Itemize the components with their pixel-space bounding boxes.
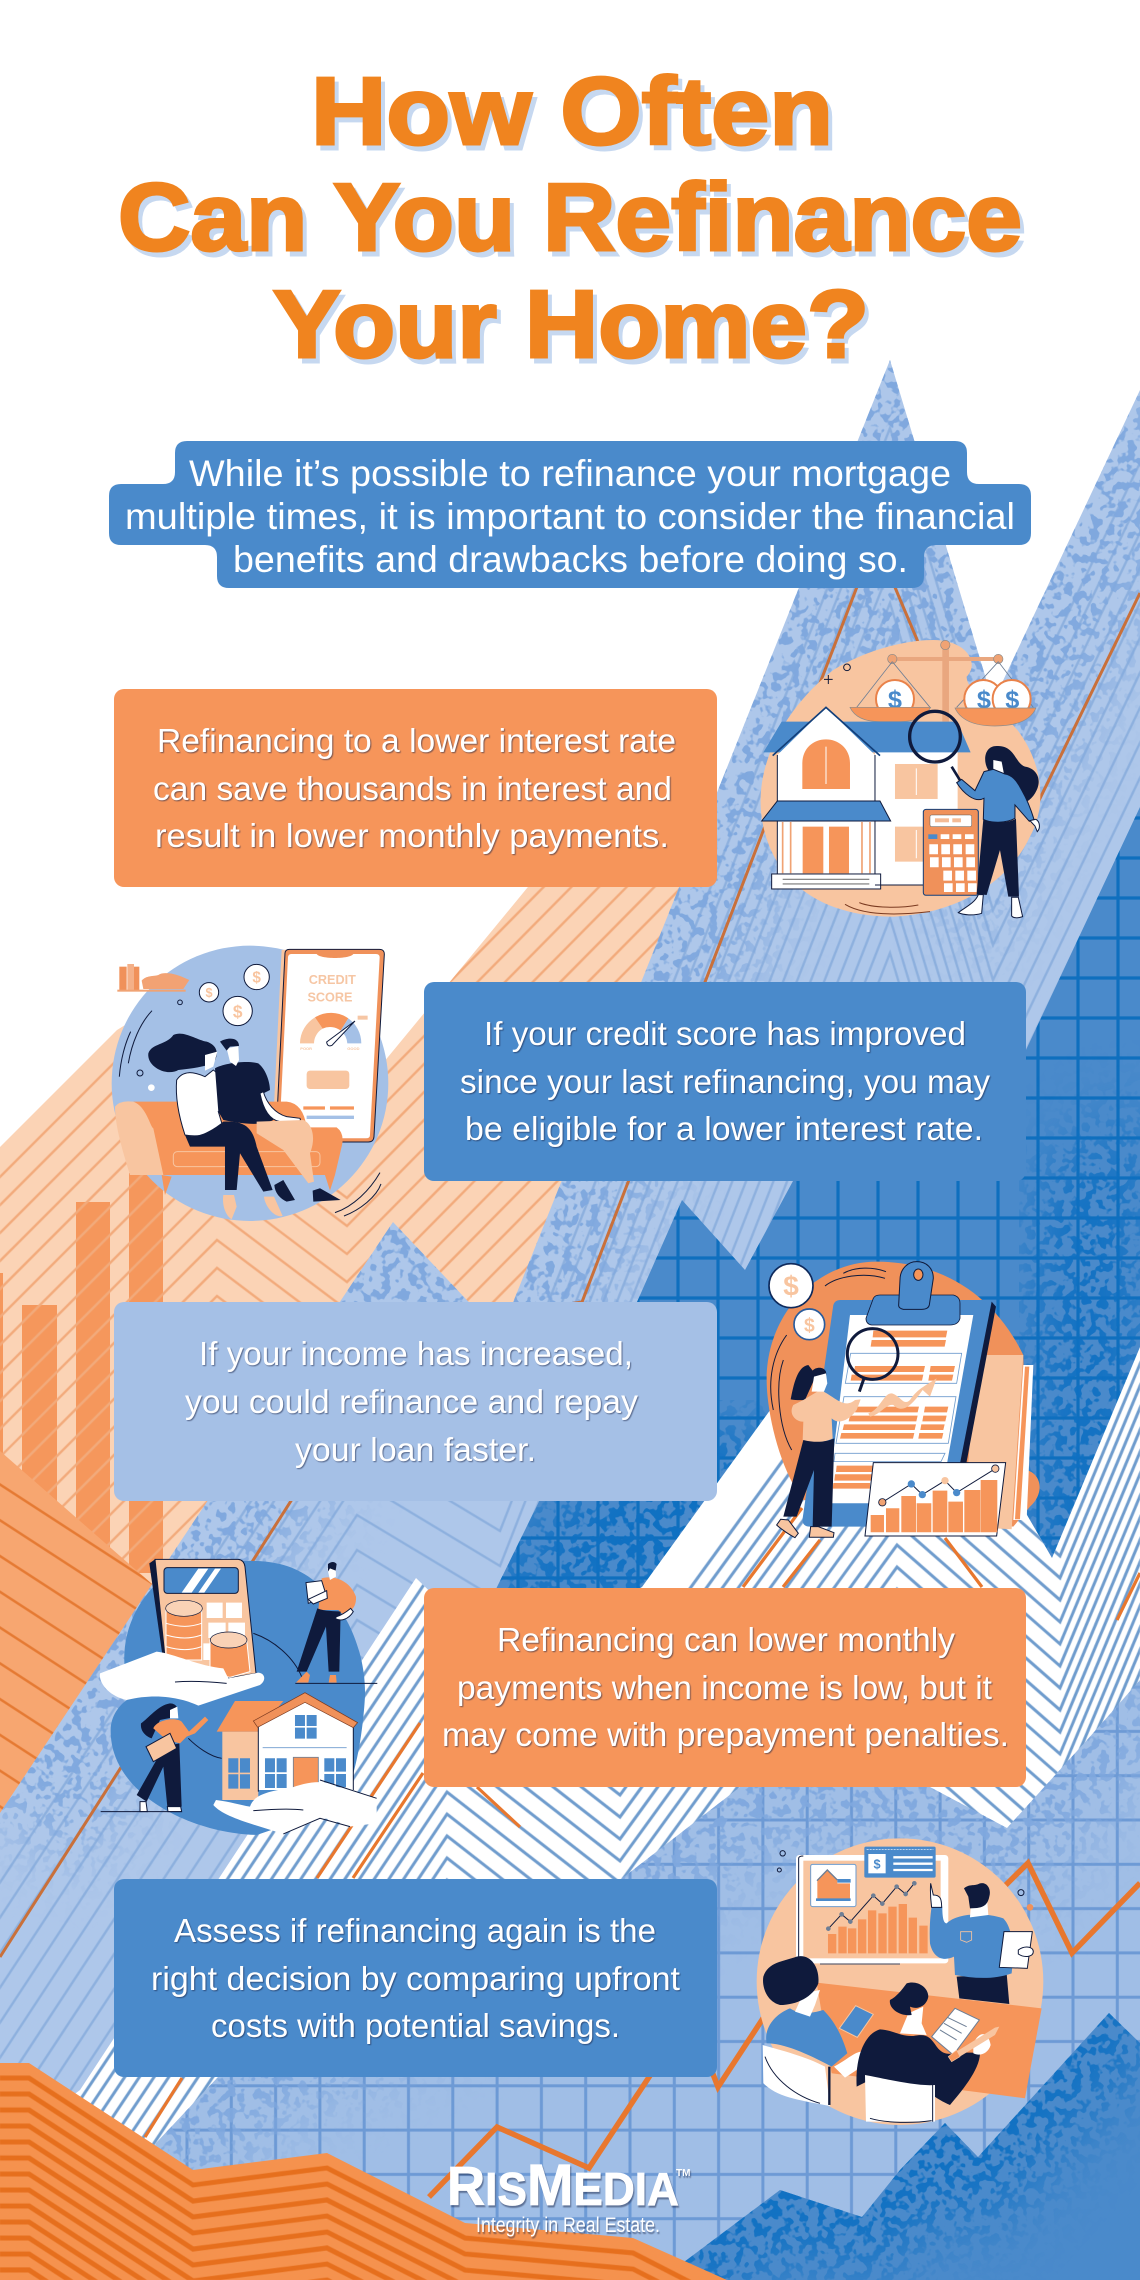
- price card: $: [873, 1858, 881, 1872]
- orange chevron mountains bottom left: [0, 2050, 760, 2280]
- text: lower interest rate: Refinancing to a lower interest rate: [157, 722, 676, 759]
- icon: sofa: [115, 1101, 343, 1195]
- icon: balance scale: $: [977, 686, 991, 714]
- light blue grid layer: [155, 1680, 1140, 2262]
- intro text: multiple times, it is important to consider the financial: [125, 496, 1015, 537]
- text: credit score: [460, 1015, 990, 1147]
- panel: credit score: [424, 982, 1026, 1181]
- title: Can You Refinance: [118, 164, 1022, 271]
- white striped mountain: [76, 1347, 1140, 2145]
- icon: team meeting with presenter: [757, 1838, 1043, 2125]
- orange zigzag line on grid: [429, 1863, 1140, 2197]
- dark blue grid mountain: [496, 807, 1140, 1588]
- text: credit score: be eligible for a lower interest rate.: [465, 1110, 983, 1147]
- person with blue shirt: [763, 1956, 862, 2106]
- icon: coins: $: [783, 1271, 799, 1302]
- title: Your Home?: [273, 271, 869, 378]
- table: [817, 1983, 1042, 2098]
- icon: hands holding calculator and house: [100, 1559, 377, 1835]
- title: [118, 58, 1022, 378]
- blue mountains bottom right: [685, 2013, 1140, 2280]
- icon: woman: [777, 1365, 861, 1538]
- text: assess refinancing: right decision by comparing upfront: [151, 1960, 680, 1997]
- icon: folder: [963, 1355, 1033, 1529]
- text: income: If your income has increased,: [199, 1335, 633, 1372]
- icon: coins: [119, 964, 269, 1091]
- icon: house: [217, 1693, 358, 1800]
- icon: house: [762, 707, 971, 914]
- icon: calculator: [923, 809, 978, 895]
- icon: house, scale, woman with calculator: [761, 640, 1040, 918]
- person with navy shirt: [856, 1982, 999, 2122]
- price card: [864, 1847, 936, 1878]
- icon: man with chart: [295, 1562, 377, 1683]
- title: How Often: [311, 58, 833, 165]
- icon: woman: [148, 1034, 238, 1136]
- text: lower interest rate: result in lower monthly payments.: [155, 817, 669, 854]
- intro text: benefits and drawbacks before doing so.: [233, 539, 908, 580]
- whiteboard: [796, 1855, 948, 1964]
- text: prepayment penalties: payments when income is low, but it: [457, 1669, 992, 1706]
- text: income: [185, 1335, 639, 1468]
- icon: woman reviewing clipboard and chart: [767, 1262, 1040, 1538]
- chart card: [865, 1463, 1006, 1536]
- icon: coins: $: [804, 1315, 815, 1336]
- text: prepayment penalties: may come with prepayment penalties.: [442, 1716, 1009, 1753]
- icon: woman: [957, 746, 1039, 918]
- icon: balance scale: $: [1005, 686, 1019, 714]
- tablet: [839, 2006, 873, 2037]
- icon: coins: $: [252, 970, 261, 987]
- text: prepayment penalties: [442, 1621, 1009, 1753]
- tagline: Integrity in Real Estate.: [476, 2214, 660, 2237]
- icon: phone with credit score gauge: SCORE: [307, 990, 352, 1004]
- icon: coins: [769, 1264, 825, 1340]
- icon: coins: $: [205, 986, 213, 1000]
- panel: income: [114, 1302, 717, 1501]
- icon: trousers and shoes: [185, 1121, 381, 1219]
- text: income: your loan faster.: [295, 1431, 536, 1468]
- panel: assess refinancing: [114, 1879, 717, 2077]
- panel: prepayment penalties: [424, 1588, 1026, 1787]
- intro panel: [109, 441, 1031, 588]
- icon: phone with credit score gauge: GOOD: [347, 1046, 360, 1051]
- text: assess refinancing: Assess if refinancing again is the: [174, 1912, 656, 1949]
- icon: coins: $: [233, 1001, 243, 1021]
- icon: upper hand: [100, 1652, 264, 1706]
- presenter: [930, 1883, 1033, 2004]
- text: credit score: If your credit score has improved: [484, 1015, 966, 1052]
- icon: lower hand: [213, 1782, 377, 1834]
- logo: RISMedia: TM: [676, 2168, 690, 2179]
- text: credit score: since your last refinancing, you may: [460, 1063, 990, 1100]
- orange striped triangle at left edge: [0, 1451, 152, 1813]
- icon: phone with credit score gauge: CREDIT: [309, 973, 356, 987]
- icon: phone with credit score gauge: POOR: [300, 1046, 312, 1051]
- icon: calculator with coins: [149, 1559, 256, 1678]
- icon: woman with folder: [101, 1703, 208, 1812]
- text: lower interest rate: [153, 722, 676, 854]
- icon: balance scale: $: [888, 686, 902, 714]
- panel: lower interest rate: [114, 689, 717, 887]
- text: lower interest rate: can save thousands in interest and: [153, 770, 672, 807]
- intro text: [125, 453, 1015, 580]
- text: income: you could refinance and repay: [185, 1383, 639, 1420]
- icon: man: [215, 1039, 314, 1183]
- icon: shelf with books: [117, 964, 189, 992]
- text: assess refinancing: costs with potential savings.: [211, 2007, 620, 2044]
- icon: balance scale: [850, 640, 1036, 726]
- text: prepayment penalties: Refinancing can lower monthly: [497, 1621, 956, 1658]
- icon: magnifying glass: [847, 1329, 898, 1392]
- light blue mountain with stipple: [0, 360, 1140, 2094]
- text: assess refinancing: [151, 1912, 680, 2044]
- peach mountain with bars and stripes: [0, 887, 679, 1813]
- icon: phone with credit score gauge: [273, 949, 384, 1142]
- icon: clipboard: [803, 1262, 996, 1527]
- icon: magnifying glass: [910, 711, 961, 781]
- icon: couple on sofa checking credit score: [112, 946, 388, 1221]
- intro text: While it’s possible to refinance your mortgage: [189, 453, 951, 494]
- logo: RISMedia: RISMEDIA: [447, 2153, 679, 2218]
